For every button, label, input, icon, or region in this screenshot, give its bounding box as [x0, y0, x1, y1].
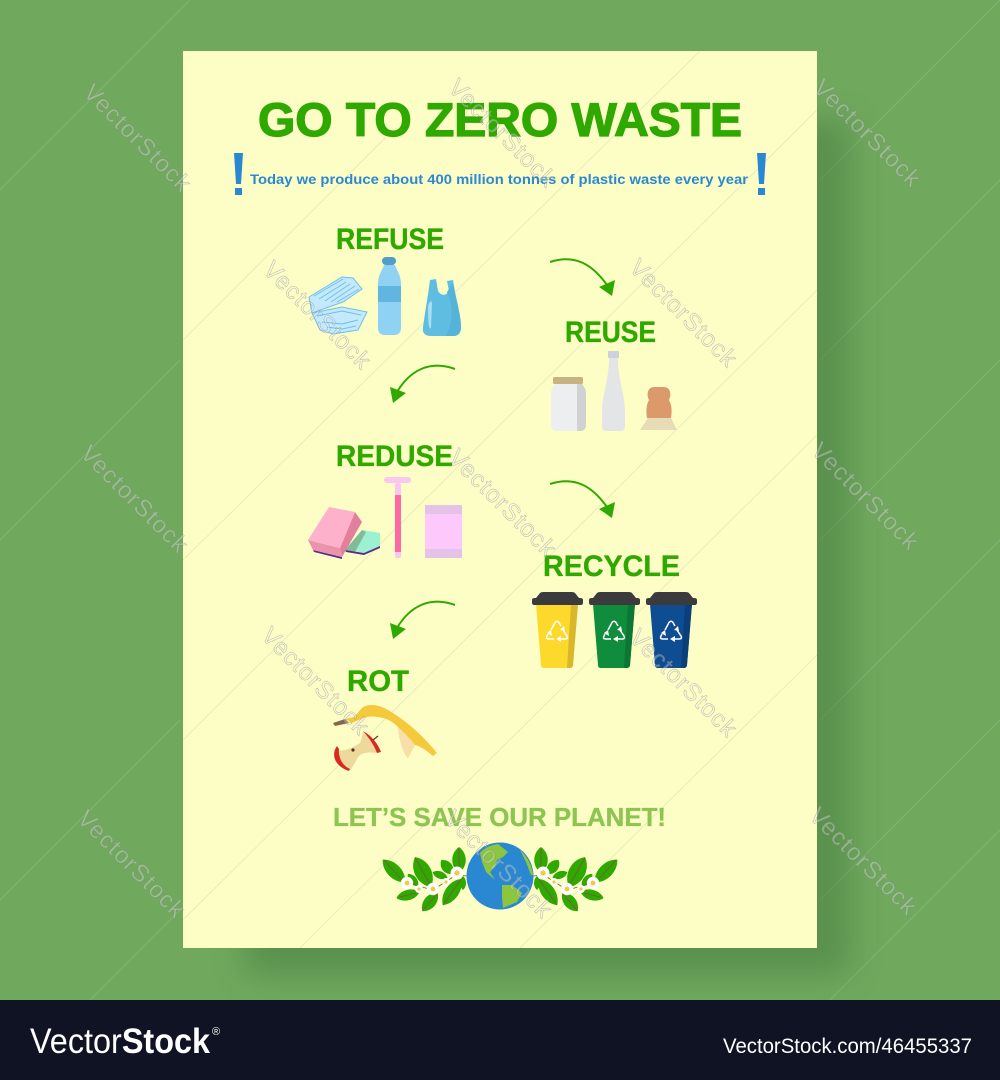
watermark group: VectorStock: [443, 74, 562, 193]
icon: soap packet: [425, 505, 462, 558]
watermark group: VectorStock: [258, 256, 377, 375]
subtitle: Today we produce about 400 million tonnes of plastic waste every year: [250, 172, 749, 187]
exclamation mark right: [757, 153, 766, 195]
title: GO TO ZERO WASTE: [258, 93, 742, 146]
footer image id: VectorStock.com/46455337: [723, 1035, 972, 1058]
icon: right leafy branch: [533, 847, 622, 915]
footer logo: VectorStock: [30, 1022, 210, 1061]
icon: razor: [384, 477, 411, 558]
icon: apple core: [334, 731, 381, 771]
heading: refuse: REFUSE: [336, 223, 444, 256]
arrow: refuse to reuse: [550, 259, 615, 296]
icon: left leafy branch: [378, 847, 467, 915]
poster shadow: [245, 120, 850, 975]
footer registered mark: ®: [212, 1026, 220, 1038]
heading: reduse: REDUSE: [336, 440, 453, 473]
watermark group: VectorStock: [72, 805, 191, 924]
icon: glass bottle: [602, 351, 625, 431]
icon: yellow bin: [532, 592, 583, 668]
arrow: recycle to rot: [390, 602, 455, 639]
watermark group: VectorStock: [256, 622, 375, 741]
watermark group: [72, 74, 927, 924]
watermark group: VectorStock: [804, 802, 923, 921]
icon: earth globe: [466, 842, 534, 910]
icon: plastic clamshell container: [309, 277, 367, 334]
icon: pink sponge: [308, 507, 362, 559]
watermark group: VectorStock: [443, 444, 562, 563]
icon: glass jar: [551, 377, 586, 431]
watermark group: VectorStock: [78, 79, 197, 198]
icon: blue bin: [646, 592, 697, 668]
heading: reuse: REUSE: [565, 316, 656, 349]
watermark group: VectorStock: [806, 437, 925, 556]
footer bar: [0, 1000, 1000, 1080]
icon: banana peel: [333, 705, 437, 758]
icon: plastic bag: [423, 279, 461, 336]
heading: recycle: RECYCLE: [543, 550, 680, 583]
heading: rot: ROT: [347, 665, 409, 698]
poster sheet: [183, 51, 817, 948]
icon: green sponge: [345, 530, 380, 555]
closing slogan: LET’S SAVE OUR PLANET!: [333, 804, 666, 832]
icon: green bin: [589, 592, 640, 668]
watermark group: VectorStock: [75, 440, 194, 559]
arrow: reuse to reduse: [390, 366, 455, 403]
icon: plastic bottle: [378, 257, 401, 335]
watermark group: VectorStock: [624, 254, 743, 373]
icon: wooden brush: [640, 387, 677, 430]
exclamation mark left: [234, 153, 243, 195]
arrow: reduse to recycle: [550, 481, 615, 518]
watermark group: VectorStock: [624, 624, 743, 743]
watermark group: VectorStock: [808, 74, 927, 193]
watermark group: VectorStock: [439, 805, 558, 924]
